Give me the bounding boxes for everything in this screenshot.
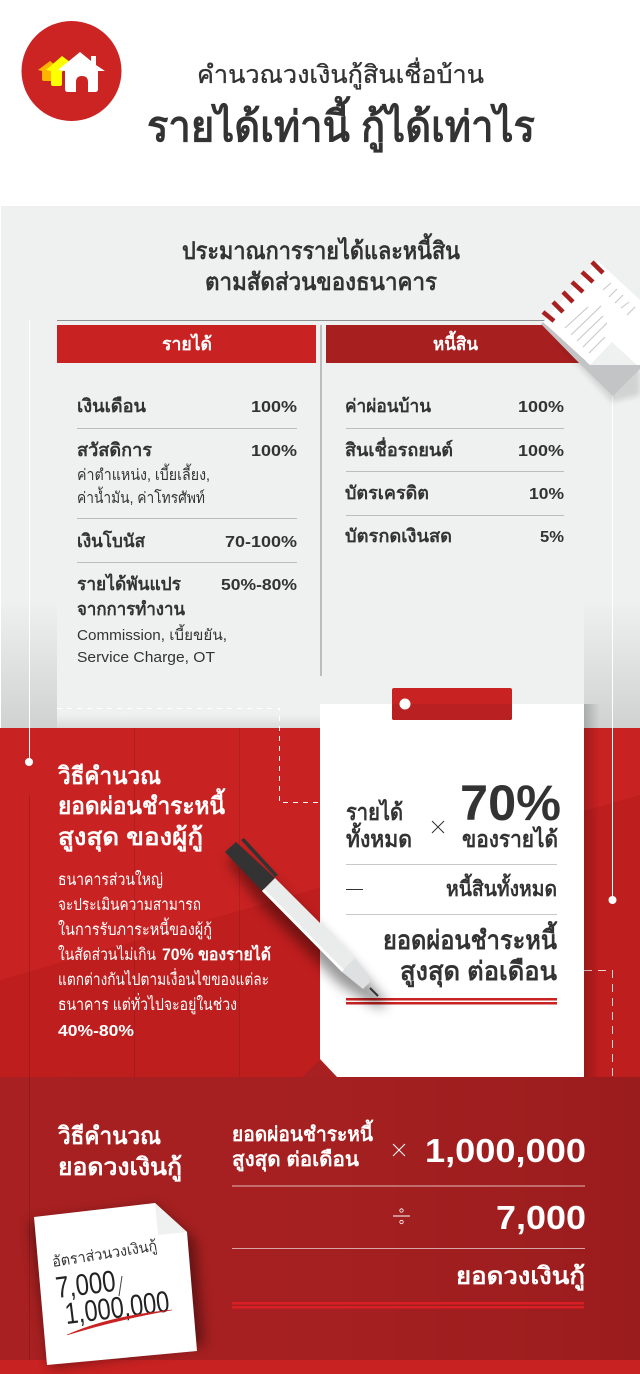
text: explanation paragraph: 70% ของรายได้ bbox=[162, 944, 271, 964]
debt row: car loan: 100% bbox=[518, 443, 564, 460]
text: explanation paragraph: จะประเมินความสามารถ bbox=[58, 896, 201, 914]
text: explanation paragraph: 40%-80% bbox=[58, 1023, 134, 1040]
income row: bonus: 70-100% bbox=[225, 534, 297, 551]
formula: maximum payment times one million: 1,000,000 bbox=[425, 1132, 586, 1169]
text: explanation paragraph: แตกต่างกันไปตามเงื่อนไขของแต่ละ bbox=[58, 968, 269, 989]
income row: salary bbox=[77, 396, 297, 416]
formula: maximum monthly payment bbox=[383, 920, 558, 988]
formula: divide by seven thousand bbox=[393, 1199, 586, 1236]
formula: total income times 70 percent: ของรายได้ bbox=[462, 825, 558, 852]
income row: variable income: 50%-80% bbox=[221, 577, 297, 594]
text: explanation paragraph: ธนาคาร แต่ทั่วไปจะอยู่ในช่วง bbox=[58, 993, 237, 1015]
heading: income and debt estimate bbox=[182, 232, 461, 296]
panel: red calculation section bbox=[0, 728, 640, 1077]
icon: notepad bbox=[541, 261, 640, 402]
debt row: cash card: 5% bbox=[540, 529, 564, 546]
text: how to calculate loan amount: วิธีคำนวณ bbox=[58, 1123, 161, 1150]
panel: dark red loan calculation section bbox=[0, 1077, 640, 1374]
debt header: หนี้สิน bbox=[433, 330, 479, 354]
title bbox=[147, 57, 535, 153]
text: explanation paragraph: ในการรับภาระหนี้ของผู้กู้ bbox=[58, 917, 212, 940]
income row: welfare: ค่าตำแหน่ง, เบี้ยเลี้ยง, bbox=[77, 463, 210, 484]
formula: total income times 70 percent: 70% bbox=[460, 775, 561, 831]
debt row: credit card: 10% bbox=[529, 486, 564, 503]
formula: total income times 70 percent bbox=[346, 775, 561, 852]
title: รายได้เท่านี้ กู้ได้เท่าไร bbox=[147, 95, 535, 153]
income row: welfare: ค่าน้ำมัน, ค่าโทรศัพท์ bbox=[77, 486, 205, 507]
income row: welfare: สวัสดิการ bbox=[77, 440, 152, 460]
income row: bonus: เงินโบนัส bbox=[77, 530, 146, 551]
debt row: home loan: 100% bbox=[518, 399, 564, 416]
income row: welfare bbox=[77, 440, 297, 507]
text: how to calculate maximum payment: วิธีคำนวณ bbox=[58, 763, 161, 790]
panel: debt table bbox=[326, 325, 586, 546]
formula: divide by seven thousand: 7,000 bbox=[496, 1199, 586, 1236]
connector: dashed line from paper bbox=[584, 970, 612, 1077]
income row: salary: 100% bbox=[251, 399, 297, 416]
text: how to calculate maximum payment bbox=[58, 763, 226, 853]
income row: variable income bbox=[77, 573, 297, 666]
panel: white header background bbox=[0, 0, 640, 206]
panel: grey income and debt background bbox=[1, 206, 640, 728]
clip bbox=[392, 688, 512, 720]
debt row: home loan bbox=[345, 396, 564, 416]
title: คำนวณวงเงินกู้สินเชื่อบ้าน bbox=[197, 57, 484, 90]
connector: left white line with dot bbox=[25, 320, 33, 766]
formula: maximum monthly payment: ยอดผ่อนชำระหนี้ bbox=[383, 920, 558, 955]
note: handwritten numbers: 7,000 bbox=[54, 1265, 117, 1305]
paper shadow bbox=[584, 704, 600, 1077]
connector: dashed line to paper bbox=[57, 708, 320, 802]
income row: variable income: จากการทำงาน bbox=[77, 599, 186, 619]
debt row: credit card: บัตรเครดิต bbox=[345, 483, 429, 503]
note: red underline bbox=[67, 1310, 172, 1335]
formula: total income times 70 percent: ทั้งหมด bbox=[346, 822, 412, 852]
formula: maximum payment times one million: สูงสุด ต่อเดือน bbox=[232, 1148, 359, 1173]
connector: right white line with dot bbox=[608, 390, 616, 904]
note: loan ratio text: อัตราส่วนวงเงินกู้ bbox=[51, 1238, 158, 1271]
note: handwritten numbers bbox=[54, 1259, 171, 1332]
formula: minus total debt: หนี้สินทั้งหมด bbox=[446, 873, 557, 901]
text: explanation paragraph: ธนาคารส่วนใหญ่ bbox=[58, 870, 163, 889]
text: explanation paragraph: ในสัดส่วนไม่เกิน bbox=[58, 945, 156, 964]
debt row: cash card bbox=[345, 526, 564, 546]
text: how to calculate loan amount bbox=[58, 1123, 182, 1182]
income row: variable income: Service Charge, OT bbox=[77, 649, 215, 666]
income row: variable income: รายได้พันแปร bbox=[77, 573, 181, 594]
debt row: car loan: สินเชื่อรถยนต์ bbox=[345, 437, 453, 460]
debt row: car loan bbox=[345, 437, 564, 460]
debt row: home loan: ค่าผ่อนบ้าน bbox=[345, 396, 432, 416]
debt header bbox=[326, 325, 586, 363]
triangle behind paper corner bbox=[302, 1060, 338, 1077]
income row: welfare: 100% bbox=[251, 443, 297, 460]
note: slash bbox=[119, 1276, 122, 1296]
text: how to calculate loan amount: ยอดวงเงินกู้ bbox=[58, 1154, 182, 1182]
icon: marker pen bbox=[225, 838, 388, 1008]
heading: income and debt estimate: ตามสัดส่วนของธนาคาร bbox=[205, 269, 437, 296]
heading: income and debt estimate: ประมาณการรายได้และหนี้สิน bbox=[182, 232, 461, 265]
text: explanation paragraph bbox=[58, 870, 271, 1040]
icon: tilted note paper bbox=[30, 1203, 204, 1368]
icon: red circle with houses bbox=[22, 21, 122, 121]
formula: loan amount result: ยอดวงเงินกู้ bbox=[456, 1263, 585, 1291]
text: how to calculate maximum payment: ยอดผ่อนชำระหนี้ bbox=[58, 787, 226, 820]
debt row: credit card bbox=[345, 483, 564, 503]
income header: รายได้ bbox=[162, 333, 212, 354]
formula: maximum payment times one million bbox=[232, 1119, 586, 1173]
panel: income table bbox=[57, 325, 316, 666]
income row: bonus bbox=[77, 530, 297, 551]
income header bbox=[57, 325, 316, 363]
debt row: cash card: บัตรกดเงินสด bbox=[345, 526, 452, 546]
text: how to calculate maximum payment: สูงสุด ของผู้กู้ bbox=[58, 824, 203, 853]
note: handwritten numbers: 1,000,000 bbox=[63, 1285, 171, 1331]
panel: white formula paper bbox=[320, 688, 584, 1077]
income row: variable income: Commission, เบี้ยขยัน, bbox=[77, 624, 227, 644]
formula: maximum monthly payment: สูงสุด ต่อเดือน bbox=[400, 956, 557, 988]
formula: maximum payment times one million: ยอดผ่อนชำระหนี้ bbox=[232, 1119, 374, 1146]
income row: salary: เงินเดือน bbox=[77, 396, 147, 416]
formula: total income times 70 percent: รายได้ bbox=[346, 798, 403, 825]
